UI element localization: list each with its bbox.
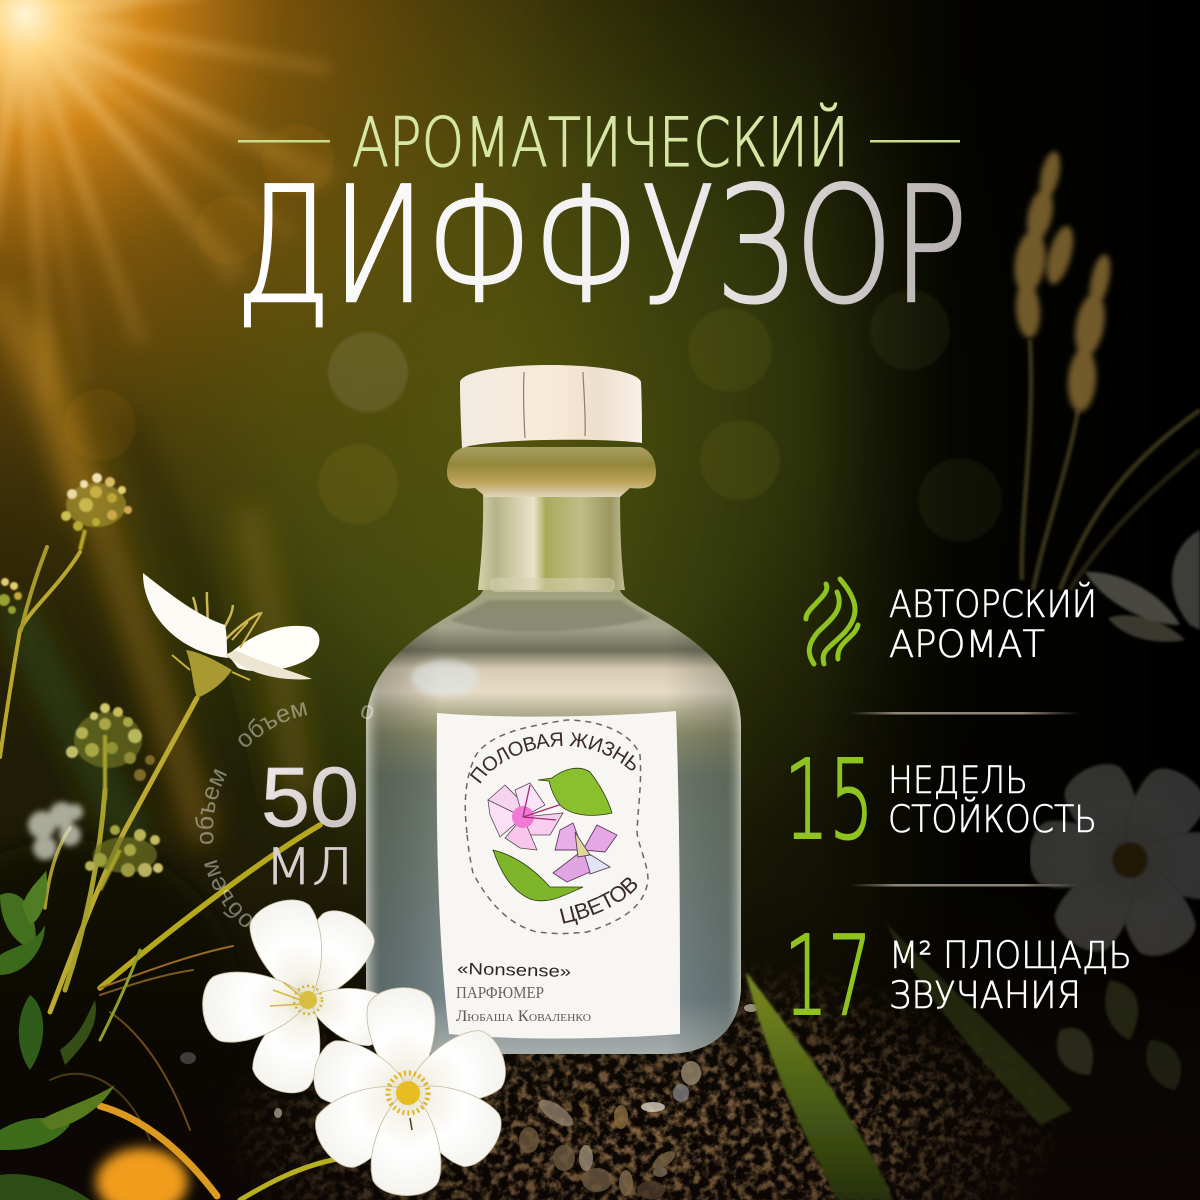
bottle lip xyxy=(447,447,656,497)
blurred small white flowers xyxy=(28,802,83,860)
brand curved text bottom: ЦВЕТОВ xyxy=(560,878,638,925)
feature: signature aroma: АВТОРСКИЙ xyxy=(889,582,1097,626)
bottle xyxy=(366,365,741,1054)
number 17: 17 xyxy=(784,912,872,1040)
left foliage xyxy=(0,802,115,1200)
bottom leaf xyxy=(493,850,583,901)
brand curved text: ПОЛОВАЯ ЖИЗНЬ xyxy=(470,732,636,784)
perfumer title: ПАРФЮМЕР xyxy=(456,983,544,1002)
glowing orange blob xyxy=(96,1148,188,1200)
feature: longevity: НЕДЕЛЬ xyxy=(888,759,1028,802)
white flower front xyxy=(305,985,514,1197)
feature: coverage area: М² ПЛОЩАДЬ xyxy=(889,934,1132,977)
shoulder shadow xyxy=(450,600,650,631)
perfumer name: Любаша Коваленко xyxy=(456,1008,591,1025)
feature: signature aroma: АРОМАТ xyxy=(889,623,1045,666)
pink flower xyxy=(488,783,563,850)
product label xyxy=(436,711,680,1038)
neck base xyxy=(490,578,615,592)
lilac flower xyxy=(553,823,617,882)
circular volume text: о xyxy=(361,705,374,719)
circular volume text xyxy=(195,702,374,927)
circular volume text: объем xyxy=(204,860,252,927)
top bud cluster xyxy=(0,473,132,614)
cap seam xyxy=(524,372,585,438)
feature: coverage area xyxy=(889,934,1132,1017)
title line left xyxy=(238,140,330,142)
number 15: 15 xyxy=(784,736,874,864)
feature: signature aroma xyxy=(889,582,1097,666)
title top: АРОМАТИЧЕСКИЙ xyxy=(352,103,849,183)
dashed outline xyxy=(465,720,648,934)
background wheat ears and stems xyxy=(1011,150,1200,590)
bottle cap xyxy=(460,365,642,448)
background bokeh xyxy=(64,124,1002,542)
icon: aroma waves xyxy=(806,579,858,664)
body edge shading xyxy=(366,590,741,1054)
sun rays xyxy=(0,0,340,402)
feature: coverage area: ЗВУЧАНИЯ xyxy=(889,974,1081,1017)
feature: longevity xyxy=(888,759,1097,841)
bottle neck xyxy=(478,492,625,590)
left stems xyxy=(0,547,343,1200)
divider one xyxy=(850,712,1080,714)
mid herb clusters xyxy=(66,703,163,890)
left gleam xyxy=(411,660,479,696)
divider two xyxy=(850,884,1080,886)
foreground right plants xyxy=(746,923,1181,1200)
ghost flower right xyxy=(1027,755,1200,965)
top-left white flower xyxy=(143,573,319,698)
title line right xyxy=(870,140,960,142)
top leaf xyxy=(538,768,612,815)
stones xyxy=(180,1004,758,1199)
title main: ДИФФУЗОР xyxy=(235,152,968,339)
circular volume text: объем xyxy=(195,768,227,844)
white flower left xyxy=(200,892,395,1101)
label paper xyxy=(437,711,680,1038)
volume number: 50 xyxy=(261,750,359,844)
volume unit: МЛ xyxy=(265,838,353,896)
blurred background streaks xyxy=(0,300,300,830)
soil xyxy=(180,966,1050,1200)
bottle body xyxy=(366,590,741,1054)
circular volume text: объем xyxy=(238,702,308,747)
feature: longevity: СТОЙКОСТЬ xyxy=(888,797,1097,841)
fragrance name: «Nonsense» xyxy=(457,960,571,981)
ghost flower upper right xyxy=(1085,530,1200,642)
